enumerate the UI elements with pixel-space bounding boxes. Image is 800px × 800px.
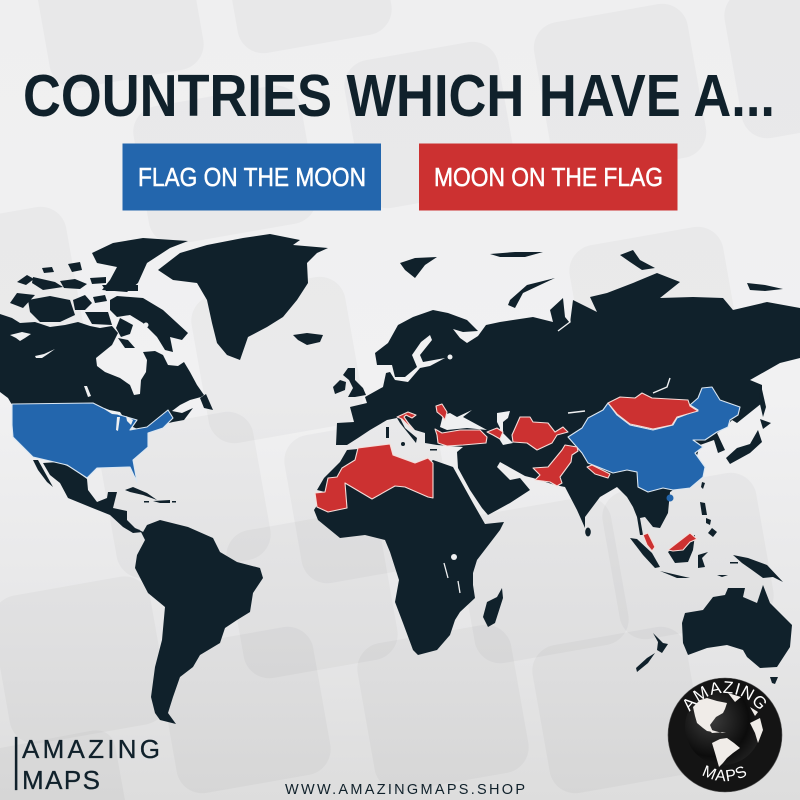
china, flag on the moon xyxy=(568,387,740,502)
round logo badge: MAPS xyxy=(702,765,746,782)
mexico and central america xyxy=(33,460,143,533)
brand wordmark: MAPS xyxy=(22,765,100,795)
legend: flag on the moon xyxy=(122,144,381,210)
croatia, moon on the flag xyxy=(397,412,416,430)
madagascar xyxy=(483,588,503,627)
turkey, moon on the flag xyxy=(435,429,487,446)
logo globe continents xyxy=(693,693,763,767)
african lakes xyxy=(444,554,460,593)
eurasia xyxy=(336,273,800,535)
azerbaijan, moon on the flag xyxy=(487,428,503,439)
iceland xyxy=(293,333,323,345)
world map xyxy=(0,234,800,724)
brand wordmark xyxy=(15,734,160,795)
usa, flag on the moon xyxy=(12,403,173,482)
mediterranean and arctic islands xyxy=(386,250,783,450)
moldova, moon on the flag xyxy=(436,404,447,420)
africa xyxy=(314,455,504,655)
australia and tasmania xyxy=(682,585,792,684)
north africa, moon on the flag xyxy=(315,444,433,512)
great britain and ireland xyxy=(333,368,366,397)
malaysia, moon on the flag xyxy=(643,533,697,551)
pakistan, moon on the flag xyxy=(533,445,578,486)
japan and sakhalin xyxy=(726,385,771,464)
logo text: AMAZING xyxy=(684,681,766,712)
turkmenistan and uzbekistan, moon on the flag xyxy=(512,417,568,450)
legend: moon on the flag xyxy=(419,144,678,210)
morocco xyxy=(317,449,358,492)
legend: moon on the flag: MOON ON THE FLAG xyxy=(434,162,663,192)
southeast asia islands xyxy=(630,482,783,582)
north america xyxy=(0,238,213,503)
mongolia, moon on the flag xyxy=(608,393,698,429)
sri lanka xyxy=(585,528,591,536)
website url: WWW.AMAZINGMAPS.SHOP xyxy=(285,782,525,798)
nepal, moon on the flag xyxy=(587,465,610,478)
new zealand xyxy=(636,633,668,672)
brand wordmark: AMAZING xyxy=(22,734,160,764)
round logo badge xyxy=(668,678,782,792)
inland seas and lakes of eurasia xyxy=(440,308,670,445)
canadian lakes xyxy=(10,322,148,397)
legend: flag on the moon: FLAG ON THE MOON xyxy=(138,162,366,192)
south america xyxy=(135,520,263,724)
caribbean islands xyxy=(125,487,157,500)
greenland xyxy=(158,234,328,360)
